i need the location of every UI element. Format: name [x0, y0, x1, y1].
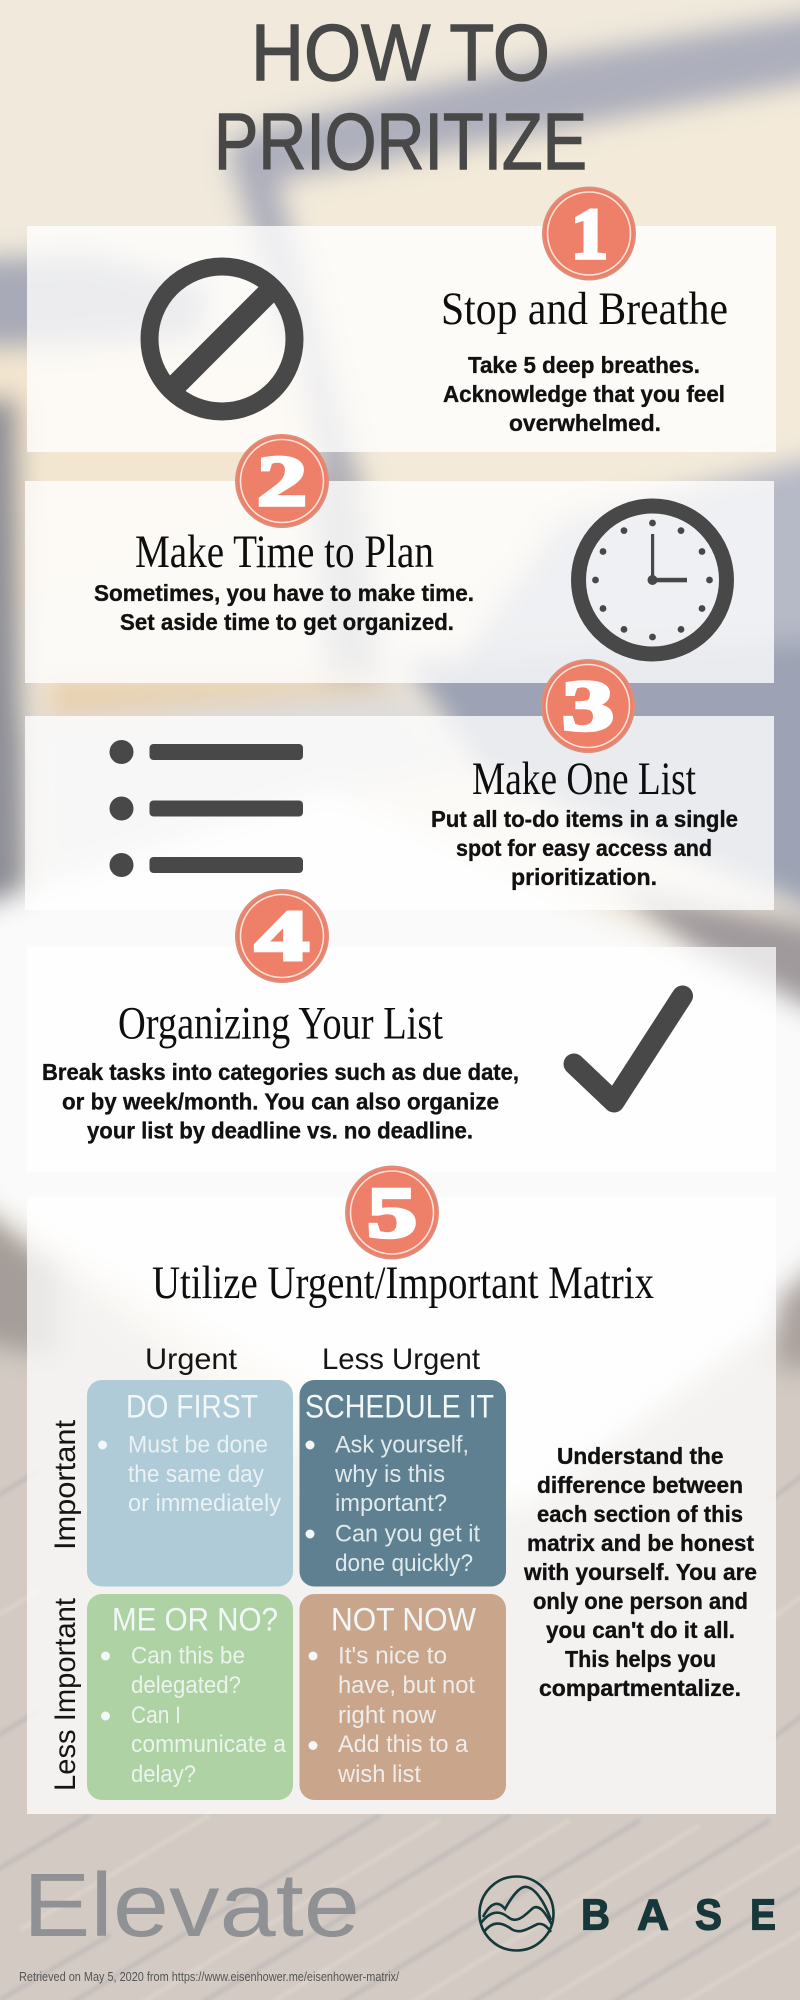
text: step 2 body: Set aside time to get organized.: [120, 609, 454, 635]
heading: organizing your list: Organizing Your List: [118, 998, 443, 1050]
panel: step 1: [27, 226, 776, 452]
cell: schedule it: why is this: [334, 1461, 445, 1488]
text: matrix explanation: only one person and: [533, 1588, 748, 1614]
text: matrix explanation: This helps you: [565, 1646, 716, 1672]
text: matrix explanation: each section of this: [537, 1501, 743, 1527]
source note: Retrieved on May 5, 2020 from https://www.eisenhower.me/eisenhower-matrix/: [19, 1970, 399, 1984]
text: matrix explanation: difference between: [537, 1472, 743, 1498]
text: step 4 body: or by week/month. You can also organize: [62, 1088, 499, 1114]
cell: schedule it: Can you get it: [335, 1520, 480, 1548]
text: step 2 body: [94, 580, 474, 635]
panel: step 5 matrix: [27, 1197, 776, 1814]
cell: me or no: ME OR NO?: [112, 1602, 278, 1638]
cell: not now: right now: [338, 1702, 437, 1729]
badge: number 1: [543, 188, 635, 280]
cell: do first: [87, 1380, 293, 1586]
cell: me or no: Can this be: [131, 1642, 245, 1670]
text: step 4 body: your list by deadline vs. no deadline.: [87, 1118, 473, 1144]
title: PRIORITIZE: [214, 97, 587, 186]
wordmark: base: E: [750, 1890, 776, 1940]
wordmark: base: B: [581, 1890, 610, 1940]
text: matrix explanation: with yourself. You are: [523, 1559, 757, 1585]
column label: urgent: Urgent: [145, 1343, 238, 1376]
cell: do first: DO FIRST: [126, 1388, 258, 1424]
cell: do first: the same day: [128, 1461, 264, 1488]
text: matrix explanation: you can't do it all.: [546, 1617, 735, 1643]
wood grain: [0, 1470, 800, 2000]
text: step 2 body: Sometimes, you have to make time.: [94, 580, 474, 606]
badge: number 5: [346, 1166, 438, 1258]
title: [214, 8, 587, 186]
text: step 1 body: Take 5 deep breathes.: [468, 352, 700, 378]
badge: number 4: 4: [255, 896, 309, 976]
cell: not now: wish list: [337, 1761, 421, 1788]
logo: elevate: Elevate: [23, 1856, 360, 1956]
icon: clock: [578, 506, 726, 654]
wordmark: base: A: [637, 1890, 669, 1940]
cell: me or no: [87, 1594, 293, 1800]
heading: make time to plan: Make Time to Plan: [135, 526, 434, 578]
wordmark: base: [581, 1890, 776, 1940]
text: matrix explanation: matrix and be honest: [527, 1530, 754, 1556]
badge: number 5: 5: [367, 1173, 417, 1253]
badge: number 1: 1: [571, 194, 608, 274]
panel: step 3: [25, 716, 774, 910]
text: step 3 body: [431, 806, 738, 890]
cell: schedule it: important?: [335, 1490, 447, 1517]
cell: schedule it: [300, 1380, 506, 1586]
panel: step 2: [25, 481, 774, 683]
panel: step 4: [27, 947, 776, 1172]
text: matrix explanation: Understand the: [557, 1443, 724, 1469]
cell: not now: have, but not: [338, 1672, 475, 1699]
row label: less important: Less Important: [49, 1597, 82, 1791]
cell: me or no: communicate a: [131, 1731, 287, 1758]
wordmark: base: S: [695, 1890, 722, 1940]
cell: schedule it: Ask yourself,: [335, 1432, 469, 1458]
row label: important: Important: [49, 1419, 82, 1550]
icon: mountain circle: [480, 1876, 554, 1950]
cell: not now: [300, 1594, 506, 1800]
column label: less urgent: Less Urgent: [322, 1343, 481, 1376]
cell: schedule it: SCHEDULE IT: [305, 1388, 494, 1424]
text: step 4 body: Break tasks into categories such as due date,: [42, 1059, 519, 1085]
text: step 4 body: [42, 1059, 519, 1144]
badge: number 2: 2: [257, 441, 307, 521]
cell: me or no: delegated?: [131, 1672, 241, 1699]
icon: check mark: [574, 996, 682, 1102]
heading: utilize urgent/important matrix: Utilize Urgent/Important Matrix: [152, 1257, 654, 1309]
text: step 1 body: [443, 352, 725, 436]
badge: number 3: 3: [562, 666, 614, 746]
text: matrix explanation: [523, 1443, 757, 1701]
title: HOW TO: [251, 8, 550, 97]
icon: list: [110, 740, 303, 877]
badge: number 4: [236, 890, 328, 982]
text: matrix explanation: compartmentalize.: [539, 1675, 741, 1701]
cell: do first: or immediately: [128, 1490, 281, 1517]
cell: not now: NOT NOW: [331, 1602, 477, 1638]
text: step 3 body: Put all to-do items in a single: [431, 806, 738, 832]
text: step 1 body: overwhelmed.: [509, 410, 661, 436]
text: step 3 body: spot for easy access and: [456, 835, 712, 861]
cell: me or no: Can I: [131, 1702, 181, 1729]
cell: do first: Must be done: [128, 1432, 268, 1458]
badge: number 3: [542, 660, 634, 752]
badge: number 2: [236, 435, 328, 527]
text: step 1 body: Acknowledge that you feel: [443, 381, 725, 407]
cell: schedule it: done quickly?: [335, 1550, 473, 1577]
heading: make one list: Make One List: [472, 753, 696, 805]
text: step 3 body: prioritization.: [511, 864, 657, 890]
cell: me or no: delay?: [131, 1761, 196, 1788]
logo: base: [480, 1876, 776, 1950]
heading: stop and breathe: Stop and Breathe: [441, 283, 728, 335]
cell: not now: Add this to a: [338, 1731, 469, 1758]
cell: not now: It's nice to: [338, 1642, 447, 1670]
icon: prohibited sign: [150, 266, 294, 412]
